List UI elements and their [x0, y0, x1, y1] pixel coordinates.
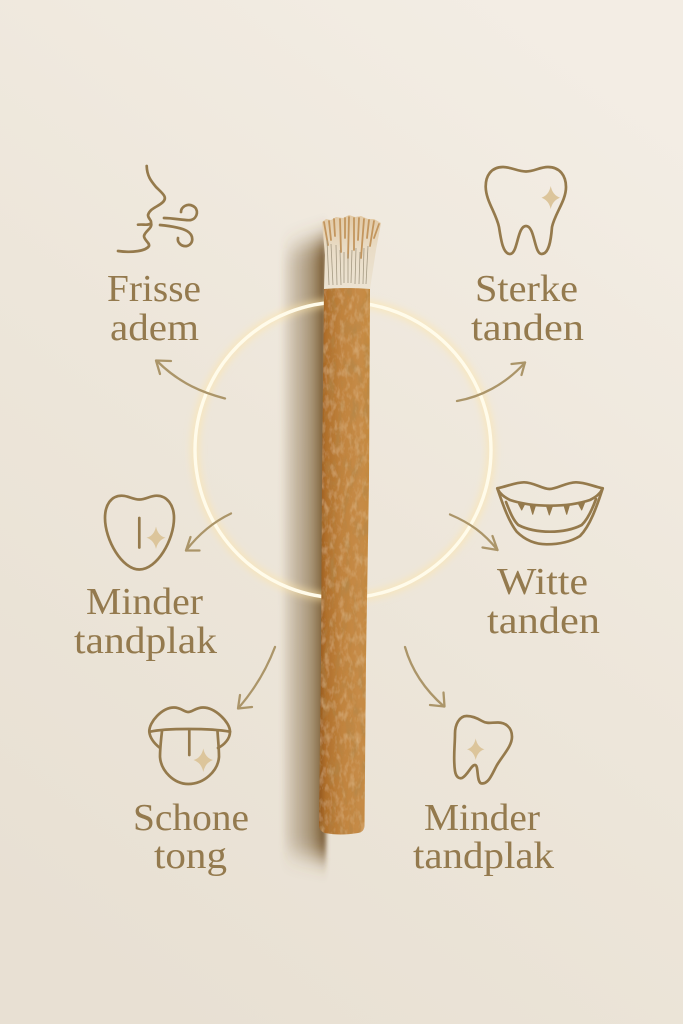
benefit: minder tandplak right [405, 647, 554, 877]
label: Schone [133, 797, 249, 839]
label [487, 561, 600, 642]
benefit: schone tong [133, 647, 275, 877]
arrow [450, 514, 498, 550]
arrow [405, 647, 444, 706]
label [413, 797, 554, 877]
label: tandplak [74, 620, 217, 662]
glowing ring [195, 302, 491, 598]
benefit: witte tanden [450, 482, 603, 642]
stick shadow [280, 238, 326, 858]
frayed brush tip [322, 215, 381, 289]
label: tanden [487, 600, 600, 642]
label: tanden [471, 307, 584, 349]
icon: tongue out [149, 708, 230, 784]
label: adem [110, 307, 199, 349]
label: tandplak [413, 835, 554, 877]
icon: tooth [486, 167, 566, 254]
label: Minder [424, 797, 540, 839]
label [107, 268, 201, 349]
icon: small tooth [454, 716, 512, 784]
arrow [457, 362, 525, 401]
icon: smile [497, 482, 603, 544]
label: Sterke [475, 268, 578, 310]
label: tong [154, 835, 227, 877]
arrow [156, 360, 225, 398]
label [74, 581, 217, 662]
label: Minder [86, 581, 203, 623]
benefit: minder tandplak left [74, 496, 231, 662]
label: Frisse [107, 268, 201, 310]
label [133, 797, 249, 877]
miswak stick [319, 215, 381, 834]
stick body [319, 288, 370, 834]
arrow [186, 514, 231, 550]
icon: face breathing [118, 166, 197, 252]
label [471, 268, 584, 349]
benefit: frisse adem [107, 166, 225, 398]
label: Witte [497, 561, 588, 603]
benefit: sterke tanden [457, 167, 584, 401]
arrow [238, 647, 275, 708]
icon: tongue with sparkle [105, 496, 174, 570]
